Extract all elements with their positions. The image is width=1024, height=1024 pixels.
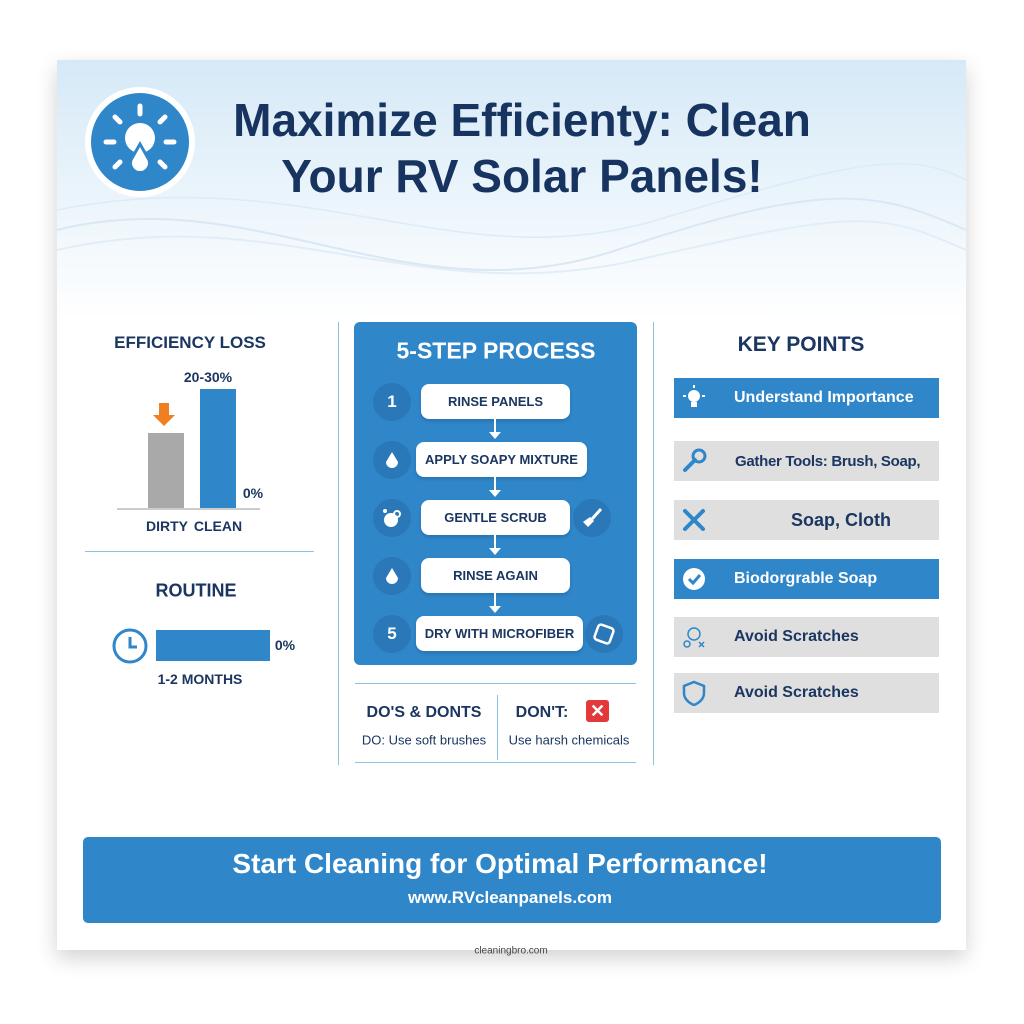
panel: efficiency loss: 0% [243,485,263,501]
panel: 5-step process [354,322,637,665]
panel: do's and don'ts: Use harsh chemicals [509,732,629,748]
step 2 [373,441,411,479]
panel: do's and don'ts: DO: Use soft brushes [362,732,486,748]
title: Maximize Efficienty: Clean [233,94,811,146]
header background waves [57,60,966,274]
panel: 5-step process: RINSE AGAIN [453,568,538,583]
panel: efficiency loss [114,333,266,534]
heading: routine: ROUTINE [156,580,236,600]
heading: 5-step process: 5-STEP PROCESS [397,338,595,364]
footer banner: Start Cleaning for Optimal Performance! [232,848,768,879]
key point 1: Understand Importance [734,389,914,406]
card [57,60,966,950]
don'ts: DON'T: [516,704,568,721]
title: Your RV Solar Panels! [281,150,763,202]
routine bar [156,630,270,661]
panel: efficiency loss: 20-30% [184,369,232,385]
key point 2: Gather Tools: Brush, Soap, [735,452,920,470]
key point 5: Avoid Scratches [734,628,859,645]
panel: 5-step process: RINSE PANELS [448,394,543,409]
icon: red x: ✕ [590,701,605,721]
panel: 5-step process: DRY WITH MICROFIBER [425,626,574,641]
panel: routine: 1-2 MONTHS [158,671,242,687]
icon: clock [112,628,148,664]
panel: routine: 0% [275,637,295,653]
heading: key points: KEY POINTS [738,333,864,356]
panel: 5-step process: APPLY SOAPY MIXTURE [425,452,578,467]
key point 4 [674,559,939,599]
step 5 [373,615,411,653]
key point 3: Soap, Cloth [791,510,891,530]
panel: efficiency loss: CLEAN [194,518,242,534]
key point 4: Biodorgrable Soap [734,570,877,587]
footer banner [83,837,941,923]
footer banner: www.RVcleanpanels.com [408,888,612,907]
step 1 [373,383,411,421]
key point 1 [674,378,939,418]
key point 6: Avoid Scratches [734,684,859,701]
step 1: 1 [387,392,397,411]
do's: DO'S & DONTS [367,704,481,721]
key point 6 [674,673,939,713]
panel: efficiency loss: DIRTY [146,518,188,534]
panel: 5-step process: GENTLE SCRUB [444,510,547,525]
step 5: 5 [387,624,397,643]
step 4 [373,557,411,595]
key point 3 [674,500,939,540]
panel: do's and don'ts [362,695,629,760]
title [233,94,811,202]
panel: routine [112,580,295,687]
icon: red x [586,700,609,722]
bar chart [117,389,260,510]
step 3 [373,499,411,537]
watermark: cleaningbro.com [474,946,548,956]
heading: efficiency loss: EFFICIENCY LOSS [114,333,266,352]
icon: sun with water drop [85,87,195,197]
key point 5 [674,617,939,657]
key point 2 [674,441,939,481]
